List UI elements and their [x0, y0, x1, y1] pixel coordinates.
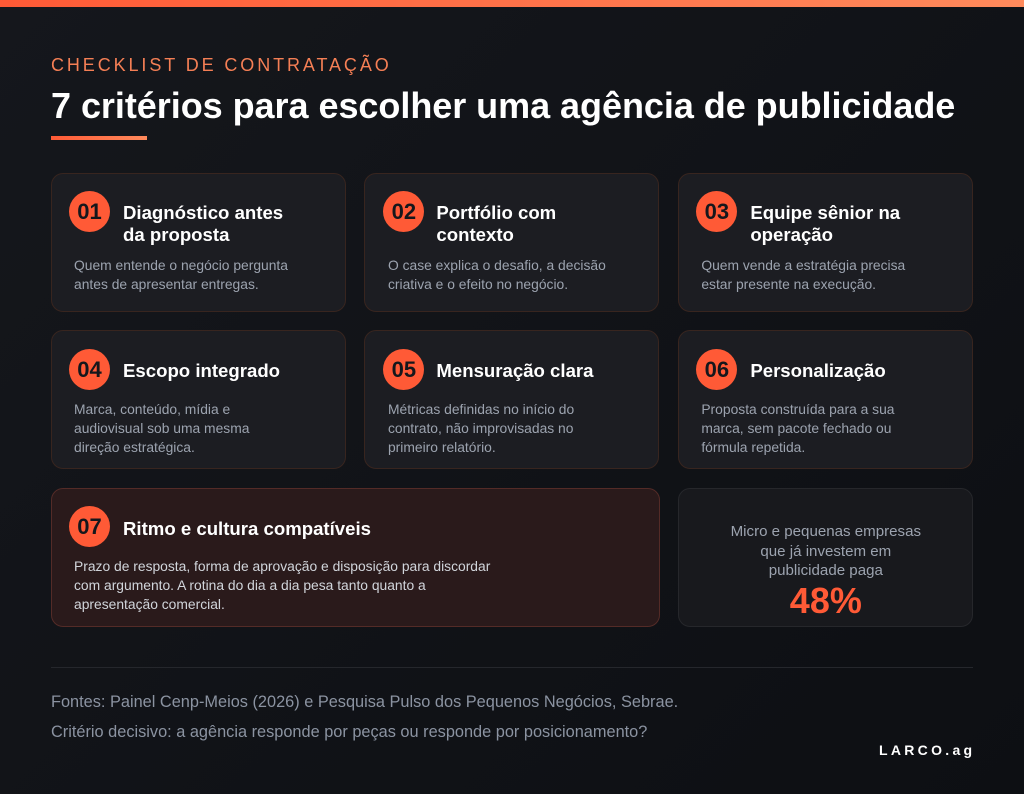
- heading 07: Ritmo e cultura compatíveis: [123, 518, 371, 538]
- heading 01: da proposta: [123, 224, 229, 245]
- text 01: [74, 257, 288, 292]
- text 05: Métricas definidas no início do: [388, 401, 574, 417]
- number 05: 05: [392, 357, 416, 382]
- title: 7 critérios para escolher uma agência de publicidade: [51, 85, 955, 126]
- footer divider: [51, 667, 973, 668]
- text 03: [701, 257, 906, 292]
- card 07 highlighted: [51, 488, 660, 627]
- text 05: primeiro relatório.: [388, 439, 496, 455]
- number 02: 02: [392, 199, 416, 224]
- text 02: criativa e o efeito no negócio.: [388, 276, 568, 292]
- stat description: Micro e pequenas empresas: [731, 523, 921, 540]
- number 01: 01: [77, 199, 102, 224]
- heading 04: Escopo integrado: [123, 360, 280, 380]
- heading 06: Personalização: [750, 360, 886, 380]
- number 01: [69, 191, 110, 232]
- heading 03: Equipe sênior na: [750, 202, 900, 223]
- stat value: 48%: [790, 580, 862, 621]
- text 03: Quem vende a estratégia precisa: [701, 257, 905, 273]
- heading 02: Portfólio com: [436, 202, 556, 223]
- stat card: [678, 488, 973, 627]
- text 01: Quem entende o negócio pergunta: [74, 257, 288, 273]
- text 03: estar presente na execução.: [701, 276, 876, 292]
- text 04: [74, 401, 250, 455]
- text 06: Proposta construída para a sua: [701, 401, 894, 417]
- text 05: [388, 401, 574, 455]
- number 03: 03: [705, 199, 729, 224]
- text 02: [388, 257, 606, 292]
- card 01: [51, 173, 346, 312]
- text 06: fórmula repetida.: [701, 439, 805, 455]
- footer sources: Fontes: Painel Cenp-Meios (2026) e Pesquisa Pulso dos Pequenos Negócios, Sebrae.: [51, 692, 678, 710]
- text 06: [701, 401, 894, 455]
- card 06: [678, 330, 973, 469]
- text 07: Prazo de resposta, forma de aprovação e disposição para discordar: [74, 558, 490, 574]
- text 05: contrato, não improvisadas no: [388, 420, 573, 436]
- text 04: direção estratégica.: [74, 439, 195, 455]
- stat description: [731, 523, 921, 579]
- card 04: [51, 330, 346, 469]
- number 07: 07: [77, 514, 102, 539]
- text 04: Marca, conteúdo, mídia e: [74, 401, 230, 417]
- heading 01: Diagnóstico antes: [123, 202, 283, 223]
- stat description: publicidade paga: [769, 562, 883, 579]
- brand wordmark: LARCO.ag: [879, 742, 975, 758]
- heading 05: Mensuração clara: [436, 360, 593, 380]
- number 03: [696, 191, 737, 232]
- text 07: [74, 558, 490, 612]
- text 07: apresentação comercial.: [74, 596, 225, 612]
- text 07: com argumento. A rotina do dia a dia pesa tanto quanto a: [74, 577, 426, 593]
- text 01: antes de apresentar entregas.: [74, 276, 259, 292]
- number 06: 06: [705, 357, 729, 382]
- heading 03: [750, 202, 900, 245]
- eyebrow label: CHECKLIST DE CONTRATAÇÃO: [51, 55, 392, 75]
- footer question: Critério decisivo: a agência responde por peças ou responde por posicionamento?: [51, 722, 647, 740]
- heading 02: contexto: [436, 224, 514, 245]
- top accent bar: [0, 0, 1024, 6]
- number 05: [383, 349, 424, 390]
- card 03: [678, 173, 973, 312]
- text 04: audiovisual sob uma mesma: [74, 420, 249, 436]
- title underline: [51, 136, 147, 140]
- card 02: [364, 173, 659, 312]
- stat description: que já investem em: [760, 543, 891, 560]
- number 02: [383, 191, 424, 232]
- heading 02: [436, 202, 556, 245]
- number 06: [696, 349, 737, 390]
- heading 01: [123, 202, 283, 245]
- heading 03: operação: [750, 224, 833, 245]
- number 07: [69, 506, 110, 547]
- card 05: [364, 330, 659, 469]
- text 06: marca, sem pacote fechado ou: [701, 420, 891, 436]
- number 04: [69, 349, 110, 390]
- text 02: O case explica o desafio, a decisão: [388, 257, 606, 273]
- number 04: 04: [77, 357, 102, 382]
